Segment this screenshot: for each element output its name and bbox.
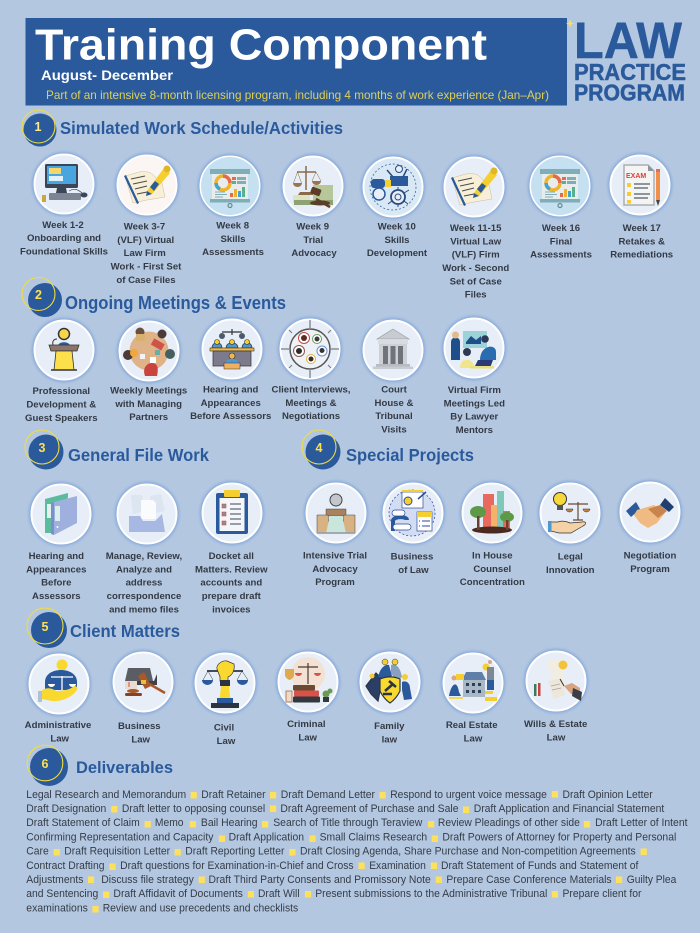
label: Analyze and xyxy=(116,564,172,575)
item: Intensive Trial Advocacy xyxy=(300,478,372,588)
label: Client Interviews, xyxy=(272,384,351,396)
label: Final xyxy=(550,236,572,247)
label: Assessors xyxy=(32,591,81,602)
label: In House xyxy=(472,550,513,562)
label: Week 11-15 xyxy=(450,223,502,234)
section 4 heading: Special Projects xyxy=(346,445,474,465)
subtitle: dates: August- December xyxy=(41,68,174,83)
label: Partners xyxy=(129,412,168,423)
section 5 heading: 5 xyxy=(42,620,49,634)
deliverables list: Examination xyxy=(369,860,426,872)
deliverables list: Draft Retainer xyxy=(201,789,266,801)
deliverables list: Guilty Plea xyxy=(627,874,677,886)
label: Skills xyxy=(220,234,246,245)
deliverables list: Draft Powers of Attorney for Property and Personal xyxy=(442,831,676,843)
deliverables list: Draft Designation xyxy=(26,803,106,815)
item: Business Law xyxy=(108,646,178,745)
deliverables list: Draft letter to opposing counsel xyxy=(122,803,265,815)
section 5 heading: Client Matters xyxy=(70,621,180,641)
deliverables list: Prepare client for xyxy=(562,888,642,900)
label: address xyxy=(126,578,162,589)
label: Foundational Skills xyxy=(20,246,108,258)
label: Law xyxy=(217,736,236,747)
banner xyxy=(26,18,567,106)
label: Trial xyxy=(303,235,323,246)
item: Wills and Estate Law xyxy=(520,646,592,743)
item: Manage correspondence xyxy=(106,478,183,615)
label: Program xyxy=(315,577,355,588)
deliverables list: Adjustments xyxy=(26,874,84,886)
item: Negotiation Program xyxy=(614,476,686,575)
label: correspondence xyxy=(107,591,181,602)
deliverables list: and Sentencing xyxy=(26,888,98,900)
item: Week 9 xyxy=(278,150,348,259)
label: Assessments xyxy=(202,247,264,258)
label: Week 3-7 xyxy=(124,222,165,232)
label: Law Firm xyxy=(124,248,166,259)
deliverables list: Memo xyxy=(155,817,184,829)
label: Virtual Firm xyxy=(448,385,501,396)
label: Advocacy xyxy=(312,564,358,575)
deliverables list: Discuss file strategy xyxy=(101,874,194,886)
label: and memo files xyxy=(109,604,179,615)
deliverables list: Draft Opinion Letter xyxy=(562,789,653,801)
deliverables list: Draft Reporting Letter xyxy=(185,846,285,858)
section 3 heading xyxy=(25,430,209,470)
label: Real Estate xyxy=(446,720,498,731)
label: By Lawyer xyxy=(450,412,499,423)
label: Intensive Trial xyxy=(303,550,367,562)
label: Before xyxy=(41,578,71,589)
label: (VLF) Firm xyxy=(452,250,500,261)
label: Visits xyxy=(381,424,407,436)
item: Legal Innovation xyxy=(534,478,606,576)
label: Appearances xyxy=(201,398,261,409)
label: Civil xyxy=(214,722,234,734)
deliverables list: Draft Statement of Claim xyxy=(26,817,140,829)
deliverables list: Search of Title through Teraview xyxy=(273,817,422,829)
item: Week 8 xyxy=(194,150,266,258)
deliverables list: examinations xyxy=(26,902,88,914)
item: Real Estate Law xyxy=(438,648,508,744)
label: Business xyxy=(391,552,433,562)
section 4 heading: 4 xyxy=(316,441,323,455)
deliverables list: Draft Application xyxy=(229,831,304,843)
label: Negotiations xyxy=(282,411,340,422)
item: Week 1-2 xyxy=(20,148,108,258)
deliverables list: Contract Drafting xyxy=(26,860,104,872)
label: prepare draft xyxy=(202,591,262,602)
label: Skills xyxy=(384,235,410,246)
label: of Case Files xyxy=(116,275,176,286)
deliverables list: Review Pleadings of other side xyxy=(438,817,580,829)
label: Program xyxy=(630,564,670,575)
label: Guest Speakers xyxy=(25,413,98,424)
label: Counsel xyxy=(473,564,511,575)
item: Week 16 xyxy=(524,150,596,261)
logo: Law Practice Program xyxy=(566,12,686,106)
label: Concentration xyxy=(460,577,525,588)
item: Business of Law xyxy=(378,478,448,576)
deliverables list: Draft Will xyxy=(258,888,300,900)
item: Week 11-15 xyxy=(438,152,510,301)
label: Innovation xyxy=(546,565,595,576)
deliverables list: Draft Letter of Intent xyxy=(595,817,688,829)
deliverables list: Draft Closing Agenda, Share Purchase and Non-competition Agreements xyxy=(300,846,636,858)
item: Court House xyxy=(358,314,428,436)
section 3 heading: 3 xyxy=(39,441,46,455)
section 2 heading: Ongoing Meetings & Events xyxy=(65,293,286,313)
label: of Law xyxy=(398,565,429,576)
deliverables list: Draft Agreement of Purchase and Sale xyxy=(280,803,458,815)
section 5 heading xyxy=(27,608,180,648)
item: Criminal Law xyxy=(272,646,344,743)
label: Remediations xyxy=(610,250,673,261)
label: Criminal xyxy=(287,719,325,730)
label: Law xyxy=(50,734,70,744)
section 6 heading: 6 xyxy=(42,757,49,771)
label: Development xyxy=(367,248,428,259)
item: Week 17: EXAM xyxy=(626,173,646,180)
label: Docket all xyxy=(209,551,254,562)
item: Professional Development xyxy=(25,314,100,424)
item: Family Law xyxy=(354,646,426,746)
deliverables list: Draft Application and Financial Statement xyxy=(474,803,664,815)
label: Files xyxy=(465,290,487,301)
label: Development & xyxy=(26,400,96,410)
deliverables list: Draft questions for Examination-in-Chief and Cross xyxy=(120,860,354,872)
section 6 heading xyxy=(27,745,173,786)
label: (VLF) Virtual xyxy=(117,235,174,246)
label: Set of Case xyxy=(450,276,502,287)
label: Professional xyxy=(33,386,90,397)
item: Week 10 xyxy=(358,152,428,259)
item: Weekly Meetings xyxy=(110,316,187,423)
deliverables list: Draft Statement of Funds and Statement of xyxy=(441,860,639,872)
deliverables list: Confirming Representation and Capacity xyxy=(26,831,214,843)
section 4 heading xyxy=(302,430,474,470)
deliverables list: Prepare Case Conference Materials xyxy=(446,874,612,886)
label: Weekly Meetings xyxy=(110,386,187,396)
subtitle: program description: Part of an intensive 8-month licensing program, including 4 months of work experience (Jan–Apr) xyxy=(46,89,549,102)
section 2 heading: 2 xyxy=(35,288,42,302)
item: Docket clipboard xyxy=(195,478,268,615)
deliverables list: Review and use precedents and checklists xyxy=(103,902,299,914)
label: Week 16 xyxy=(542,223,580,234)
deliverables list: Bail Hearing xyxy=(201,817,258,829)
deliverables list: Care xyxy=(26,846,49,858)
logo: Law Practice Program: LAW xyxy=(574,12,683,69)
item: Week 17 xyxy=(604,150,676,261)
label: Wills & Estate xyxy=(524,719,587,730)
deliverables list: Draft Demand Letter xyxy=(281,789,375,801)
label: Law xyxy=(547,732,566,743)
label: Family xyxy=(374,721,405,732)
label: Hearing and xyxy=(29,551,84,562)
label: Legal xyxy=(558,552,583,562)
label: Onboarding and xyxy=(27,233,101,244)
label: Negotiation xyxy=(624,550,677,562)
item: Client Interviews xyxy=(272,314,351,422)
title: Training Component xyxy=(35,20,487,70)
deliverables list: Present submissions to the Administrative Tribunal xyxy=(315,888,547,900)
section 1 heading xyxy=(22,110,343,146)
deliverables list: Draft Requisition Letter xyxy=(64,846,170,858)
label: Manage, Review, xyxy=(106,551,183,562)
item: Administrative Law xyxy=(24,648,94,744)
label: Work - Second xyxy=(442,263,509,274)
deliverables list: Small Claims Research xyxy=(320,831,427,843)
label: Tribunal xyxy=(375,411,413,422)
deliverables list: Draft Third Party Consents and Promissory Note xyxy=(208,874,431,886)
section 1 heading: Simulated Work Schedule/Activities xyxy=(60,118,343,138)
label: with Managing xyxy=(114,399,182,410)
section 3 heading: General File Work xyxy=(68,445,209,465)
deliverables list xyxy=(26,789,688,914)
label: Before Assessors xyxy=(190,411,271,422)
label: Law xyxy=(464,733,483,744)
label: Assessments xyxy=(530,250,592,261)
label: Week 1-2 xyxy=(42,220,84,231)
label: Business xyxy=(118,721,161,732)
label: Law xyxy=(131,734,151,745)
item: Hearing and Appearances xyxy=(190,314,271,422)
label: invoices xyxy=(212,604,251,615)
label: Virtual Law xyxy=(450,236,502,247)
section 1 heading: 1 xyxy=(35,120,42,134)
item: Week 3-7 xyxy=(111,150,182,286)
label: Work - First Set xyxy=(111,262,182,272)
section 6 heading: Deliverables xyxy=(76,758,173,777)
deliverables list: Draft Affidavit of Documents xyxy=(113,888,243,900)
label: Retakes & xyxy=(618,236,665,247)
label: Court xyxy=(381,384,408,396)
deliverables list: Respond to urgent voice message xyxy=(390,789,547,801)
label: Law xyxy=(298,732,318,743)
label: Week 8 xyxy=(216,220,250,232)
logo: Law Practice Program: PROGRAM xyxy=(574,80,685,106)
label: accounts and xyxy=(200,578,262,589)
item: Civil Law xyxy=(190,648,260,747)
label: Hearing and xyxy=(203,384,259,396)
label: Matters. Review xyxy=(195,564,268,575)
item: Hearing binders xyxy=(26,478,96,602)
label: Advocacy xyxy=(291,248,337,259)
deliverables list: Legal Research and Memorandum xyxy=(26,789,186,801)
label: Week 10 xyxy=(378,222,416,232)
label: law xyxy=(382,734,398,746)
label: Week 17 xyxy=(623,223,661,234)
label: Appearances xyxy=(26,564,86,575)
label: Meetings Led xyxy=(444,398,505,409)
label: Administrative xyxy=(25,720,91,731)
item: Virtual Firm Meetings xyxy=(438,312,510,436)
section 2 heading xyxy=(22,278,286,317)
item: In House Counsel xyxy=(456,478,528,588)
label: House & xyxy=(375,398,414,409)
logo: Law Practice Program: PRACTICE xyxy=(574,59,686,85)
label: Meetings & xyxy=(285,398,337,409)
label: Mentors xyxy=(456,425,493,436)
label: Week 9 xyxy=(296,222,329,232)
